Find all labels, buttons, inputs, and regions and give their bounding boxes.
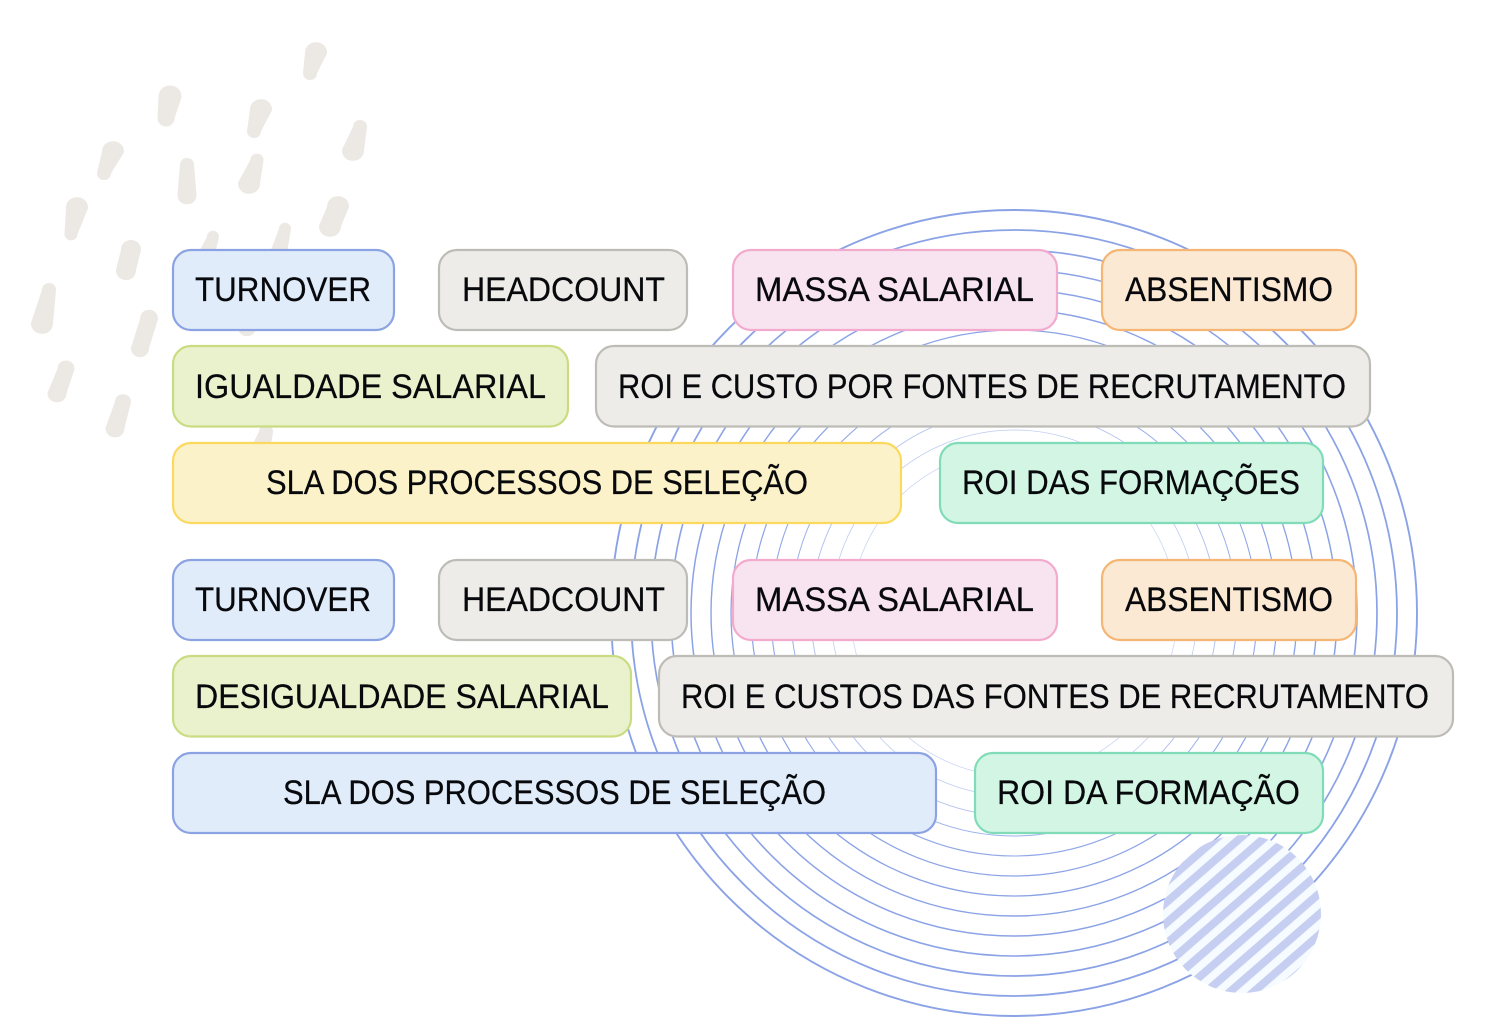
tag: SLA DOS PROCESSOS DE SELEÇÃO (yellow): SLA DOS PROCESSOS DE SELEÇÃO [266,463,808,502]
tag: ABSENTISMO [1102,250,1356,330]
tag: TURNOVER [173,250,394,330]
tag: HEADCOUNT (second set) [439,560,687,640]
tag: SLA DOS PROCESSOS DE SELEÇÃO (blue): SLA DOS PROCESSOS DE SELEÇÃO [283,773,826,812]
tag: ROI E CUSTOS DAS FONTES DE RECRUTAMENTO: ROI E CUSTOS DAS FONTES DE RECRUTAMENTO [681,678,1429,716]
tag: ROI E CUSTOS DAS FONTES DE RECRUTAMENTO [659,656,1453,736]
tag: ROI DAS FORMAÇÕES [940,443,1323,523]
tag: IGUALDADE SALARIAL [173,346,568,426]
tag: HEADCOUNT: HEADCOUNT [462,271,665,309]
tag: TURNOVER: TURNOVER [195,271,371,309]
tag: SLA DOS PROCESSOS DE SELEÇÃO (blue) [173,753,936,833]
tag: ABSENTISMO: ABSENTISMO [1125,271,1333,309]
tag: ROI DA FORMAÇÃO: ROI DA FORMAÇÃO [997,773,1300,812]
tag: ABSENTISMO (second set): ABSENTISMO [1125,581,1333,619]
tag: HEADCOUNT [439,250,687,330]
tag: SLA DOS PROCESSOS DE SELEÇÃO (yellow) [173,443,901,523]
concentric rings [611,210,1417,1016]
tag: TURNOVER (second set): TURNOVER [195,581,371,619]
tag: MASSA SALARIAL [733,250,1057,330]
tag: MASSA SALARIAL: MASSA SALARIAL [755,271,1034,309]
tag: ROI E CUSTO POR FONTES DE RECRUTAMENTO [596,346,1370,426]
tag: ROI DA FORMAÇÃO [975,753,1323,833]
tag: HEADCOUNT (second set): HEADCOUNT [462,581,665,619]
tag: ROI E CUSTO POR FONTES DE RECRUTAMENTO: ROI E CUSTO POR FONTES DE RECRUTAMENTO [618,368,1346,406]
hatched circle [1163,835,1321,993]
tag: ROI DAS FORMAÇÕES: ROI DAS FORMAÇÕES [962,462,1300,502]
tag: ABSENTISMO (second set) [1102,560,1356,640]
tag: MASSA SALARIAL (second set): MASSA SALARIAL [755,581,1034,619]
tag: IGUALDADE SALARIAL: IGUALDADE SALARIAL [195,368,546,406]
tag: DESIGUALDADE SALARIAL [173,656,631,736]
decorative beige droplets [32,43,366,459]
tag: DESIGUALDADE SALARIAL: DESIGUALDADE SALARIAL [195,678,609,716]
tag: TURNOVER (second set) [173,560,394,640]
tag: MASSA SALARIAL (second set) [733,560,1057,640]
